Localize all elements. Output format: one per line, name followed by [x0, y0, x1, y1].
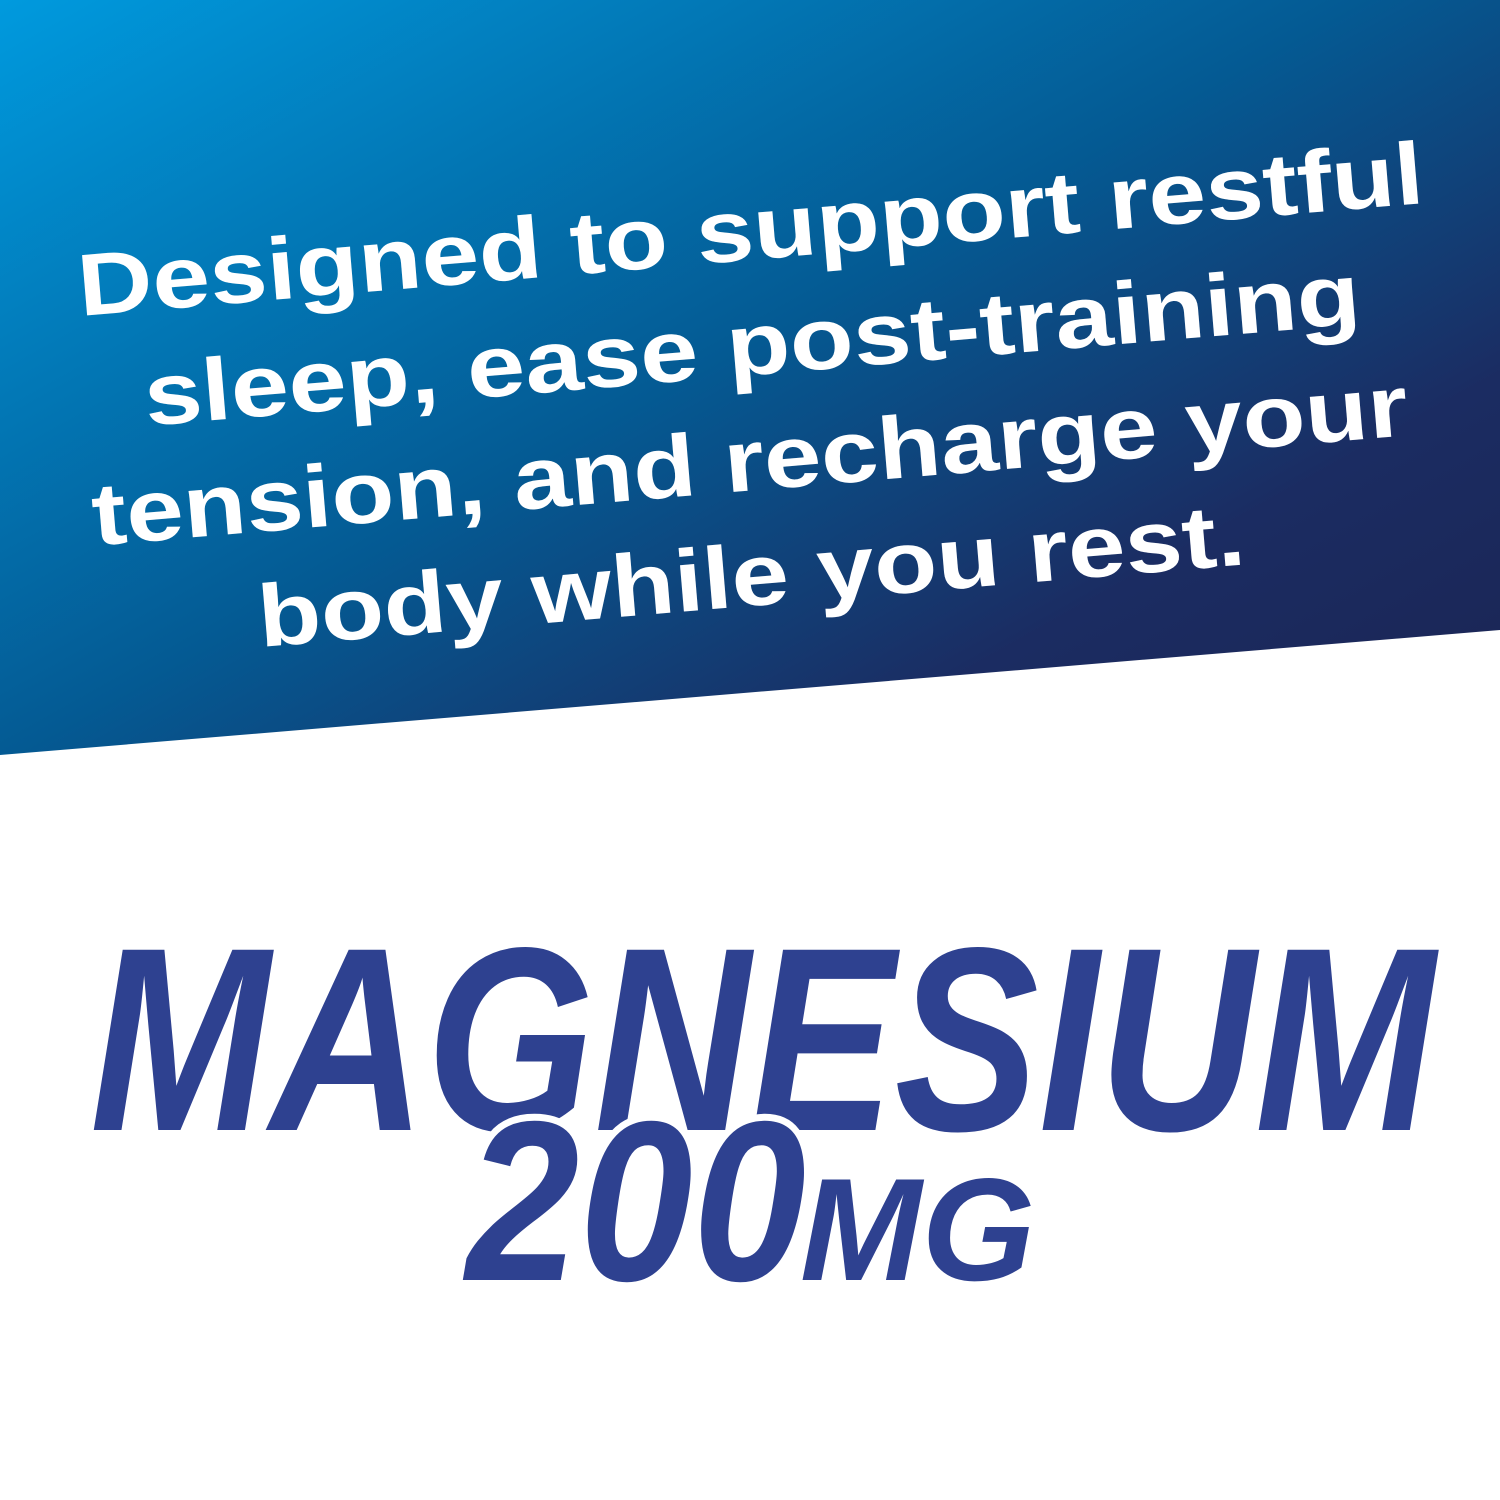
dose: 200MG: 200MG: [462, 1075, 1035, 1329]
headline text: [69, 123, 1456, 679]
banner: gradient top: [0, 0, 1500, 755]
headline text: body while you rest.: [254, 484, 1249, 666]
headline text: Designed to support restful: [74, 123, 1427, 335]
headline text: tension, and recharge your: [88, 355, 1411, 564]
headline text: sleep, ease post-training: [140, 244, 1364, 445]
